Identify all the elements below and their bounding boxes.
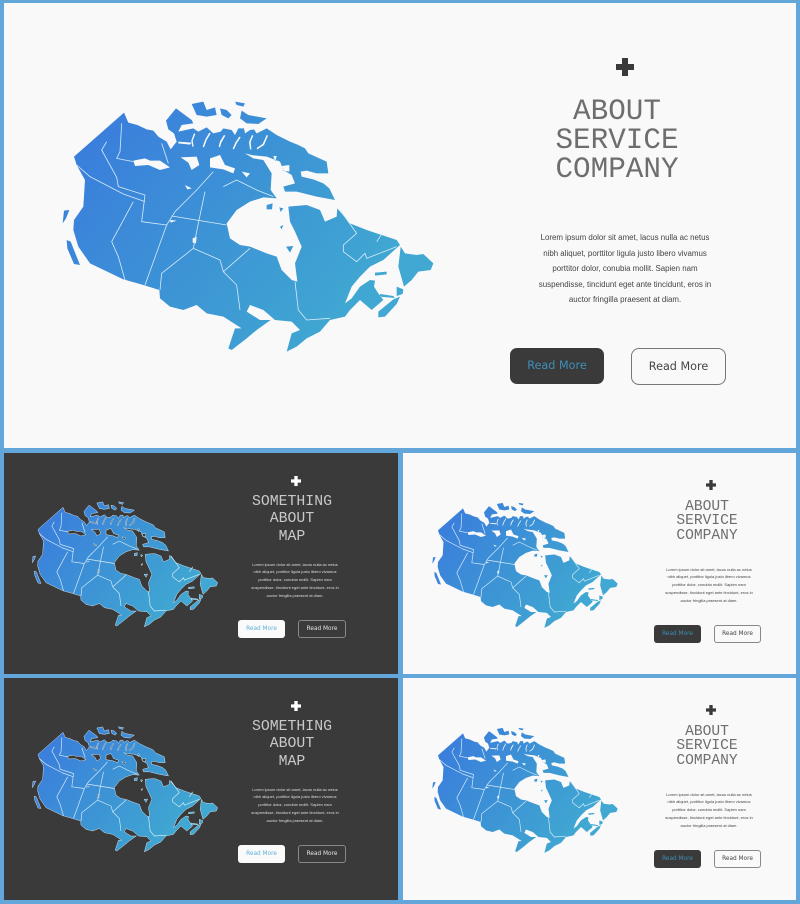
heading: about service company (676, 498, 738, 544)
button: read more white (238, 845, 285, 863)
heading: about service company: COMPANY (676, 753, 738, 769)
heading: about service company: ABOUT (573, 94, 661, 128)
panel: main light slide (4, 3, 796, 448)
map: Canada small (432, 502, 618, 628)
map: Canada small (432, 728, 618, 853)
text block: lorem ipsum: Lorem ipsum dolor sit amet, lacus nulla ac netus (666, 792, 752, 796)
heading: about service company (676, 724, 738, 769)
button: read more outline (631, 348, 726, 385)
text block: lorem ipsum: porttitor dolor, conubia mollit. Sapien nam (552, 264, 698, 273)
heading: something about map: SOMETHING (252, 719, 332, 735)
button: read more outline: Read More (307, 851, 337, 857)
text block: lorem ipsum: Lorem ipsum dolor sit amet, lacus nulla ac netus (666, 566, 752, 572)
text block: lorem ipsum: porttitor dolor, conubia mollit. Sapien nam (672, 807, 746, 812)
text block: lorem ipsum: Lorem ipsum dolor sit amet, lacus nulla ac netus (252, 562, 338, 566)
text block: lorem ipsum: suspendisse, tincidunt eget ante tincidunt, eros in (665, 590, 753, 595)
button: read more white: Read More (246, 626, 277, 632)
text block: lorem ipsum: nibh aliquet, porttitor ligula justo libero vivamus (668, 799, 750, 804)
text block: lorem ipsum (251, 562, 339, 598)
text block: lorem ipsum (665, 792, 753, 828)
text block: lorem ipsum: porttitor dolor, conubia mollit. Sapien nam (672, 582, 746, 587)
text block: lorem ipsum: suspendisse, tincidunt eget ante tincidunt, eros in (539, 280, 711, 289)
text block: lorem ipsum: auctor fringilla praesent at diam. (681, 598, 737, 603)
text block: lorem ipsum: porttitor dolor, conubia mollit. Sapien nam (258, 802, 332, 807)
button: read more outline: Read More (649, 360, 708, 373)
button: read more outline (714, 625, 761, 643)
button: read more filled: Read More (662, 631, 693, 637)
text block: lorem ipsum: auctor fringilla praesent at diam. (569, 295, 681, 304)
text block: lorem ipsum: porttitor dolor, conubia mollit. Sapien nam (258, 577, 332, 582)
icon: plus (616, 58, 634, 76)
button: read more filled: Read More (662, 856, 693, 862)
panel: light slide bottom (403, 678, 796, 900)
button: read more filled (510, 348, 604, 384)
text block: lorem ipsum: Lorem ipsum dolor sit amet, lacus nulla ac netus (541, 233, 709, 242)
button: read more filled: Read More (527, 359, 587, 372)
heading: about service company: SERVICE (555, 124, 679, 156)
map: Canada large (62, 102, 434, 352)
button: read more outline (298, 620, 346, 638)
text block: lorem ipsum (665, 566, 753, 603)
text block: lorem ipsum: Lorem ipsum dolor sit amet, lacus nulla ac netus (252, 786, 338, 792)
text block: lorem ipsum: suspendisse, tincidunt eget ante tincidunt, eros in (251, 585, 339, 590)
heading: about service company: ABOUT (685, 498, 729, 514)
panel: dark slide bottom (4, 678, 398, 900)
heading: something about map: ABOUT (270, 511, 314, 527)
text block: lorem ipsum: auctor fringilla praesent at diam. (267, 818, 323, 823)
button: read more filled (654, 850, 701, 868)
text block: lorem ipsum: suspendisse, tincidunt eget ante tincidunt, eros in (251, 810, 339, 815)
button: read more white (238, 620, 285, 638)
text block: lorem ipsum: auctor fringilla praesent at diam. (681, 823, 737, 828)
text block: lorem ipsum: nibh aliquet, porttitor ligula justo libero vivamus (254, 794, 336, 799)
icon: plus (291, 701, 301, 711)
text block: lorem ipsum: nibh aliquet, porttitor ligula justo libero vivamus (254, 569, 336, 574)
button: read more filled (654, 625, 701, 643)
icon: plus (706, 705, 716, 715)
heading: about service company: ABOUT (685, 724, 729, 740)
map: Canada small (32, 502, 218, 628)
heading: something about map: ABOUT (270, 736, 314, 752)
panel: light slide top (403, 453, 796, 674)
heading: something about map: SOMETHING (252, 494, 332, 510)
text block: lorem ipsum: suspendisse, tincidunt eget ante tincidunt, eros in (665, 815, 753, 820)
icon: plus (706, 480, 716, 490)
heading: about service company (555, 94, 679, 186)
text block: lorem ipsum (539, 233, 711, 304)
text block: lorem ipsum: nibh aliquet, porttitor ligula justo libero vivamus (668, 574, 750, 579)
heading: about service company: COMPANY (676, 528, 738, 544)
heading: something about map: MAP (279, 754, 305, 770)
heading: something about map (252, 719, 332, 770)
heading: about service company: SERVICE (676, 738, 738, 754)
text block: lorem ipsum: auctor fringilla praesent at diam. (267, 593, 323, 598)
button: read more white: Read More (246, 851, 277, 857)
heading: something about map: MAP (279, 529, 305, 545)
text block: lorem ipsum (251, 786, 339, 823)
text block: lorem ipsum: nibh aliquet, porttitor ligula justo libero vivamus (543, 249, 707, 258)
button: read more outline (298, 845, 346, 863)
button: read more outline: Read More (307, 626, 337, 632)
button: read more outline (714, 850, 761, 868)
panel: dark slide top (4, 453, 398, 674)
heading: about service company: COMPANY (555, 152, 679, 186)
button: read more outline: Read More (722, 856, 753, 862)
icon: plus (291, 476, 301, 486)
button: read more outline: Read More (722, 631, 753, 637)
heading: something about map (252, 494, 332, 545)
heading: about service company: SERVICE (676, 513, 738, 529)
map: Canada small (32, 726, 218, 852)
